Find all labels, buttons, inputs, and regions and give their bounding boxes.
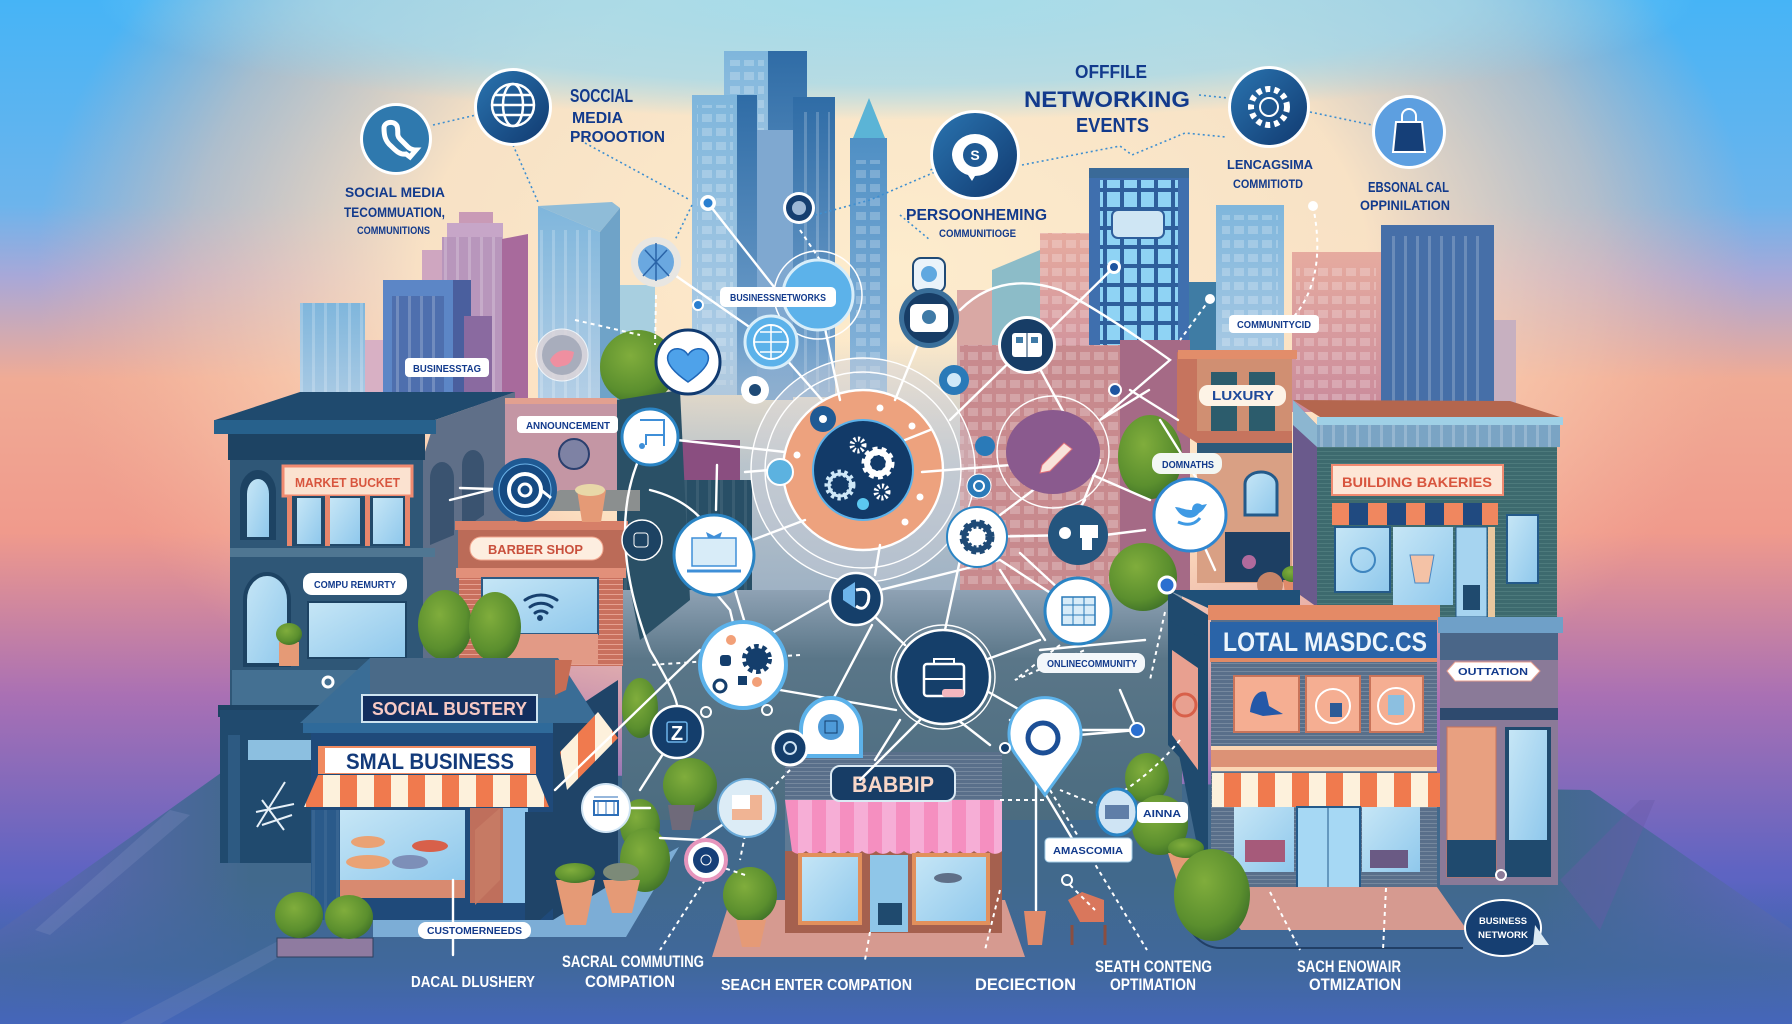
building: green bakery [1293, 400, 1563, 617]
small node dots [323, 384, 1506, 885]
sign: market bucket: MARKET BUCKET [295, 475, 400, 490]
label: offline networking events: NETWORKING [1024, 87, 1190, 112]
label: social media promotion [570, 86, 665, 146]
bottom captions: OTMIZATION [1309, 975, 1401, 994]
white pill labels: ONLINECOMMUNITY [1047, 659, 1137, 670]
icon: small location dots [693, 192, 1318, 310]
white pill labels: ANNOUNCEMENT [526, 421, 610, 432]
label: community [1227, 157, 1314, 191]
label: social media technology: TECOMMUATION, [344, 204, 445, 220]
icon: wifi [525, 595, 557, 620]
icon: laptop [674, 515, 754, 595]
sign: bakery [1332, 465, 1503, 495]
label: offline networking events: EVENTS [1076, 115, 1149, 137]
bottom captions [411, 952, 1401, 994]
sign: babbip: BABBIP [852, 772, 934, 797]
label: personal branding community: COMMUNITIOGE [939, 228, 1016, 240]
icon: small tower with label: AINNA [1143, 809, 1181, 820]
building: lotal shop [1168, 590, 1442, 900]
icon: wrench [360, 103, 432, 175]
label: optimization: OPPINILATION [1360, 197, 1450, 213]
badge: business network: NETWORK [1478, 930, 1529, 940]
label: social media technology [344, 184, 445, 237]
awning: orange striped right [1212, 773, 1442, 807]
awning: navy striped [1332, 503, 1498, 525]
label: social media promotion: PROOOTION [570, 129, 665, 146]
label: social media promotion: SOCCIAL [570, 86, 633, 106]
icon: twitter bird [1154, 479, 1226, 551]
building: left lower annex [220, 710, 312, 863]
label: social media technology: SOCIAL MEDIA [345, 184, 445, 200]
icon: shop card [718, 779, 776, 837]
skyline buildings [300, 51, 1516, 425]
sign: bakery: BUILDING BAKERIES [1342, 474, 1492, 490]
icon: faded pink ribbon [536, 329, 588, 381]
display windows [1234, 676, 1423, 732]
sign: lotal masdc: LOTAL MASDC.CS [1223, 627, 1427, 657]
icon: pink ring [686, 840, 726, 880]
white pill labels: AMASCOMIA [1053, 846, 1123, 857]
sign: upper shop: LUXURY [1212, 388, 1274, 403]
icon: briefcase [891, 625, 995, 729]
building: upper brick shop [1177, 350, 1302, 606]
icon: pencil node [997, 396, 1109, 508]
building: pink upper shop [505, 390, 690, 640]
icon: people node [1048, 505, 1108, 565]
icon: at sign [493, 458, 557, 522]
label: optimization [1360, 179, 1450, 213]
bottom captions: SACRAL COMMUTING [562, 952, 704, 971]
bottom captions: DACAL DLUSHERY [411, 974, 535, 991]
sign: social bustery [362, 695, 537, 722]
white pill labels: BUSINESSNETWORKS [730, 293, 826, 304]
icon: book [998, 316, 1056, 374]
icon: small tower with label [1097, 789, 1188, 835]
left bushes behind network [600, 330, 1182, 611]
building: barber shop [418, 484, 628, 666]
bottom captions: SEACH ENTER COMPATION [721, 977, 912, 994]
label: personal branding community [906, 207, 1047, 240]
icon: gears white [700, 622, 786, 708]
icon: globe [474, 68, 552, 146]
bottom captions: SACH ENOWAIR [1297, 957, 1401, 976]
icon: music square [622, 409, 678, 465]
icon: basketball globe [631, 237, 681, 287]
icon: dollar badge [930, 110, 1020, 200]
icon: megaphone node [830, 573, 882, 625]
bottom captions: DECIECTION [975, 975, 1076, 994]
bottom captions: SEATH CONTENG [1095, 957, 1212, 976]
building: babbip pink awning shop [712, 752, 1025, 957]
label: social media technology: COMMUNITIONS [357, 225, 430, 237]
potted plant on balcony [276, 623, 302, 666]
plants near small business [275, 678, 717, 939]
plants and chair near babbip [723, 867, 1105, 947]
white pill labels: OUTTATION [1458, 667, 1528, 678]
bottom captions: OPTIMATION [1110, 975, 1196, 994]
network connecting lines [450, 203, 1386, 960]
white pill labels [303, 287, 1540, 939]
shop window with pastries [340, 810, 465, 898]
white pill labels: DOMNATHS [1162, 460, 1214, 471]
icon: tv shield [801, 698, 861, 756]
sign: upper shop [1199, 385, 1286, 406]
icon: store [582, 784, 630, 832]
label: community: COMMITIOTD [1233, 177, 1303, 191]
label: personal branding community: PERSOONHEMING [906, 207, 1047, 224]
ground and street [0, 590, 1792, 1024]
pink awning [785, 800, 1002, 854]
icon: calendar [1045, 578, 1111, 644]
white pill labels: CUSTOMERNEEDS [427, 926, 522, 937]
label: community: LENCAGSIMA [1227, 157, 1314, 172]
icon: globe small [745, 316, 797, 368]
icon: network gear [1228, 66, 1310, 148]
sidewalk: lotal shop [1180, 887, 1467, 948]
building: navy corner shop [214, 392, 515, 735]
icon: z badge: Z [671, 723, 683, 745]
icon: dark circle [773, 731, 807, 765]
icon: center gears [813, 420, 913, 520]
icon: small nodes near center [622, 365, 995, 560]
icon: gear white [947, 507, 1007, 567]
white pill labels: COMMUNITYCID [1237, 320, 1311, 331]
icon: shopping bag [1372, 95, 1446, 169]
label: social media promotion: MEDIA [572, 110, 623, 127]
sidewalk: small business [277, 847, 679, 957]
icon: heart [656, 330, 720, 394]
plants near lotal [1125, 753, 1250, 941]
sign: barber shop: BARBER SHOP [488, 542, 583, 557]
icon: camera hub [899, 258, 959, 348]
badge: business network [1465, 900, 1549, 956]
bottom captions: COMPATION [585, 972, 675, 991]
badge: business network: BUSINESS [1479, 916, 1527, 926]
sign: market bucket [283, 466, 412, 496]
label: offline networking events: OFFFILE [1075, 62, 1147, 82]
sign: babbip [831, 766, 955, 801]
label: optimization: EBSONAL CAL [1368, 179, 1449, 196]
icon: dollar badge: S [970, 147, 980, 163]
awning: orange striped [304, 775, 549, 807]
mid-block buildings behind network [622, 340, 1190, 720]
white pill labels: COMPU REMURTY [314, 580, 396, 591]
label: offline networking events [1024, 62, 1190, 137]
icon: z badge [651, 706, 703, 758]
icon: large blue cloud [774, 251, 862, 339]
icon: location pin [1009, 698, 1081, 795]
center orange target rings [751, 358, 975, 582]
building: small business shop [300, 658, 618, 930]
dotted lines between top icons [433, 95, 1372, 240]
sign: small business: SMAL BUSINESS [346, 749, 514, 774]
building: right annex [1438, 617, 1563, 885]
sign: barber shop [470, 537, 603, 560]
balcony rail [232, 670, 362, 706]
white pill labels: BUSINESSTAG [413, 364, 481, 375]
sign: social bustery: SOCIAL BUSTERY [372, 699, 527, 719]
